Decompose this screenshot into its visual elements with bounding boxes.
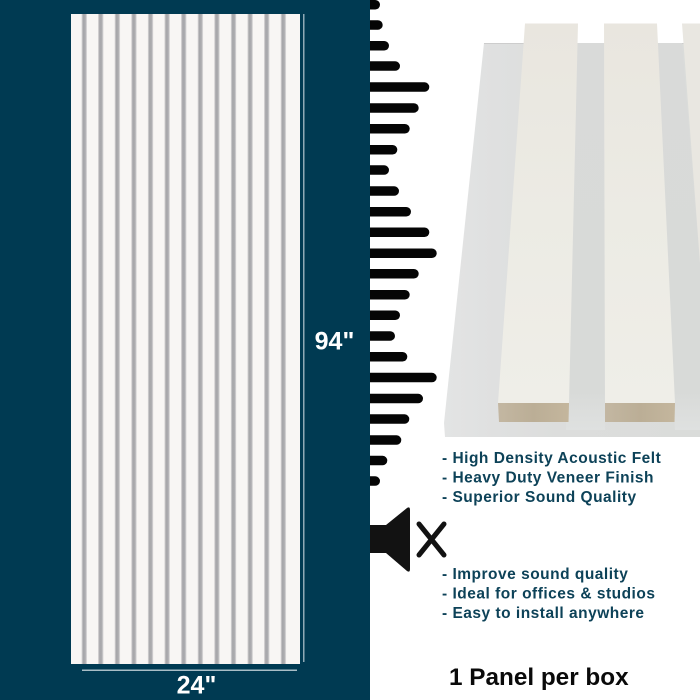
- feature list 1: [442, 450, 661, 506]
- feature list 2: - Ideal for offices & studios: [442, 586, 655, 602]
- feature list 2: [442, 566, 655, 622]
- slat wall panel: [71, 14, 300, 664]
- teal background panel: [0, 0, 370, 700]
- feature list 2: - Improve sound quality: [442, 566, 628, 583]
- feature list 1: - High Density Acoustic Felt: [442, 450, 661, 467]
- icon: muted speaker: [370, 507, 444, 572]
- sound wave bars: [360, 0, 437, 486]
- feature list 1: - Heavy Duty Veneer Finish: [442, 470, 654, 486]
- height dimension line: [303, 14, 304, 662]
- width label: 24": [177, 672, 216, 700]
- height label: 94": [315, 328, 354, 356]
- feature list 1: - Superior Sound Quality: [442, 489, 637, 506]
- product photo: acoustic slat close-up: [444, 24, 700, 437]
- feature list 2: - Easy to install anywhere: [442, 605, 645, 622]
- width dimension line: [82, 670, 297, 671]
- box quantity note: 1 Panel per box: [449, 664, 629, 691]
- teal edge over bars: [360, 0, 370, 490]
